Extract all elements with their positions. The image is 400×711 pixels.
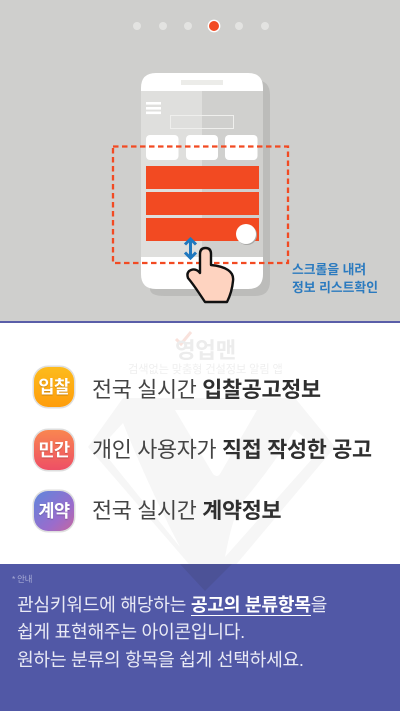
phone scroll diagram [112,73,290,304]
contract label: 전국 실시간 계약정보 [92,498,281,523]
phone shadow [150,80,270,296]
category buttons [146,135,258,160]
search box [170,116,234,128]
icon: contract badge [34,491,74,531]
panel: information footer [0,564,400,711]
note text: 관심키워드에 해당하는 공고의 분류항목을 [17,594,327,614]
item: bid [32,366,321,408]
divider line [0,321,400,323]
note label: * 안내 [12,574,32,584]
icon: contract badge: 계약 [38,501,70,521]
callout: scroll hint [292,262,378,295]
dashed selection frame [113,146,288,263]
callout: scroll hint: 정보 리스트확인 [292,280,378,295]
floating button [236,224,257,245]
phone body [141,73,263,289]
note text [17,594,327,670]
icon: private badge [34,430,74,470]
icon: bid badge [34,367,74,407]
red list rows [146,166,259,241]
item: contract [32,490,281,532]
watermark: check mark [175,331,192,346]
icon: menu [146,102,161,114]
note text: 쉽게 표현해주는 아이콘입니다. [17,622,245,642]
pagination dots [133,20,269,32]
private label: 개인 사용자가 직접 작성한 공고 [92,437,372,462]
item: private [32,428,372,472]
bid label: 전국 실시간 입찰공고정보 [92,377,321,402]
watermark: tagline: 검색없는 맞춤형 건설정보 알림 앱 [128,364,283,376]
icon: private badge: 민간 [38,440,70,460]
panel: phone illustration [0,0,400,323]
callout: scroll hint: 스크롤을 내려 [292,262,366,277]
pointer notch [180,564,232,590]
note text: 원하는 분류의 항목을 쉽게 선택하세요. [17,650,304,670]
icon: pointing hand [187,248,233,302]
icon: up-down arrow [185,239,196,258]
watermark: brand name: 영업맨 [175,338,236,363]
icon: bid badge: 입찰 [38,377,70,397]
